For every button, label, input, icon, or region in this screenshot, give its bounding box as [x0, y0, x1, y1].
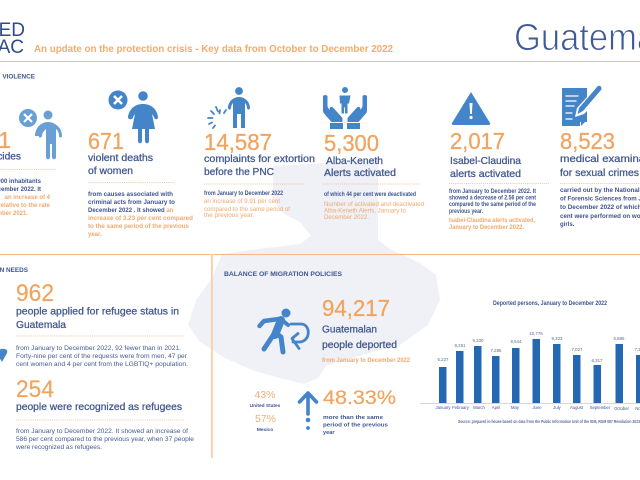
bar values: 9,323 — [552, 336, 563, 341]
description: recognized refugees — [15, 428, 195, 451]
month labels: July — [553, 405, 562, 410]
figure: 2,017: 2,017 — [450, 128, 505, 154]
figure: 671: 671 — [88, 128, 124, 154]
label: refugee applications: people applied for refugee status in — [16, 306, 179, 318]
description: homicides: an increase of 4 — [5, 195, 51, 201]
description: increase: period of the previous — [323, 422, 388, 428]
figure: 14,587: 14,587 — [204, 129, 272, 155]
panel: complaints for extortion: an increase of 9.91 per cent — [204, 199, 280, 205]
icon: partial figure at page edge — [0, 349, 7, 362]
description: refugee applications — [16, 345, 188, 368]
panel: complaints for extortion: the previous year. — [204, 213, 254, 219]
bar values: 6,317 — [592, 358, 603, 363]
panel: Isabel-Claudina alerts: Isabel-Claudina alerts activated, — [449, 218, 535, 224]
share: Mexico — [255, 413, 276, 433]
description: increase: more than the same — [323, 415, 383, 421]
month labels: January — [436, 405, 451, 410]
description: violent deaths: to the same period of the previous — [88, 224, 190, 230]
description: Isabel-Claudina: compared to the same period of the — [449, 202, 537, 208]
bar values: 9,544 — [510, 339, 522, 344]
chart title: Deported persons, January to December 2022 — [493, 301, 608, 307]
label: medical examinations — [560, 154, 640, 179]
share: United States: United States — [250, 403, 281, 409]
month labels — [436, 405, 640, 411]
panel: Alba-Keneth alerts: Alba-Keneth Alerts, January to — [324, 208, 407, 214]
month labels: September — [590, 405, 611, 410]
icon: document and pen — [562, 86, 602, 126]
description: violent deaths: from causes associated with — [88, 192, 173, 198]
description: violent deaths: December 2022 . It showed an — [88, 208, 174, 214]
figure: 8,523: 8,523 — [560, 128, 615, 154]
description: recognized refugees: from January to December 2022. It showed an increase of — [16, 428, 188, 435]
figure: 48.33%: 48.33% — [323, 387, 396, 409]
background map of Guatemala — [188, 160, 440, 384]
bar values: 9,251 — [454, 343, 466, 348]
heading: balance of migration policies: BALANCE OF MIGRATION POLICIES — [224, 271, 343, 278]
icon: warning triangle — [452, 92, 490, 125]
description: Alba-Keneth: of which 44 per cent were deactivated — [324, 192, 416, 198]
panel: Isabel-Claudina alerts: January to December 2022. — [449, 225, 524, 231]
description: refugee applications: from January to December 2022, 92 fewer than in 2021. — [16, 345, 181, 352]
panel: medical examinations — [560, 86, 640, 228]
bar values — [438, 331, 640, 363]
description: increase: year — [323, 430, 335, 436]
figure: 962: 962 — [16, 280, 54, 307]
bar values: 9,330 — [472, 338, 484, 343]
label: Isabel-Claudina: alerts activated — [450, 169, 521, 180]
month labels: October — [614, 406, 630, 411]
panel: complaints for extortion — [204, 87, 315, 219]
label: medical examinations: for sexual crimes — [560, 168, 639, 179]
share: Mexico: Mexico — [257, 427, 273, 433]
bar values: 7,286 — [490, 348, 502, 353]
label: Alba-Keneth: Alerts activated — [324, 168, 396, 179]
figure: 254: 254 — [16, 376, 54, 403]
description: Isabel-Claudina: showed a decrease of 2.56 per cent — [449, 196, 536, 202]
description: homicides — [0, 179, 51, 217]
subtitle: An update on the protection crisis - Key data from October to December 2022 — [34, 44, 393, 55]
month labels: May — [511, 405, 520, 410]
label: Isabel-Claudina: Isabel-Claudina — [450, 156, 521, 167]
icon: homicide victim — [19, 109, 62, 159]
period note: from January to December 2022 — [322, 358, 411, 364]
icon: up arrow — [300, 393, 316, 430]
panel: Alba-Keneth alerts: Number of activated and deactivated — [324, 202, 424, 208]
label: people deported: Guatemalan — [322, 324, 377, 336]
month labels: March — [473, 405, 485, 410]
label: refugee applications: Guatemala — [16, 320, 66, 331]
panel: homicides — [0, 109, 62, 217]
bar values: 6,227 — [438, 357, 449, 362]
label: complaints: complaints for extortion — [204, 154, 315, 165]
label: people deported: people deported — [322, 340, 397, 351]
label: Isabel-Claudina — [450, 156, 521, 180]
description: refugee applications: Forty-nine per cent of the requests were from men, 47 per — [16, 353, 187, 360]
description: recognized refugees: were recognized as refugees. — [15, 444, 102, 451]
logo — [0, 20, 25, 58]
month labels: August — [570, 405, 584, 410]
description: refugee applications: cent women and 4 per cent from the LGBTIQ+ population. — [16, 361, 188, 368]
section heading: violence: VIOLENCE — [2, 74, 36, 80]
month labels: June — [532, 405, 542, 410]
panel: complaints for extortion: compared to the same period of — [204, 207, 290, 213]
description: violent deaths: year. — [88, 232, 102, 238]
bar chart: deported persons — [420, 301, 640, 424]
bar values: 6,885 — [614, 336, 625, 341]
description: increase — [323, 415, 388, 436]
label: violent deaths of women: violent deaths — [88, 153, 153, 164]
label: complaints — [204, 154, 315, 178]
label: complaints: before the PNC — [204, 167, 274, 178]
share: Mexico: 57% — [255, 413, 276, 425]
icon: person and burst — [208, 87, 250, 128]
icon: woman with x — [108, 90, 158, 143]
month labels: February — [452, 405, 470, 410]
description: complaints: from January to December 2022 — [204, 191, 284, 197]
panel: balance of migration policies — [224, 271, 411, 436]
panel: Alba-Keneth alerts — [323, 87, 424, 221]
description: medical examinations: girls. — [560, 222, 575, 228]
description: medical examinations — [560, 188, 640, 228]
description: violent deaths: criminal acts from January to — [88, 200, 175, 206]
description: Isabel-Claudina: from January to December 2022. It — [449, 189, 536, 195]
panel: Alba-Keneth alerts: December 2022. — [324, 215, 369, 221]
description: Isabel-Claudina — [449, 189, 537, 215]
month labels: April — [492, 405, 500, 410]
figure: 94,217: 94,217 — [322, 295, 390, 321]
bar values: 10,775 — [529, 331, 543, 336]
label: Alba-Keneth: Alba-Keneth — [326, 156, 383, 167]
label: recognized refugees: people were recognized as refugees — [16, 402, 182, 413]
bar values: 7,027 — [572, 347, 583, 352]
panel: Isabel-Claudina alerts — [449, 92, 549, 231]
description: violent deaths: increase of 3.23 per cent compared — [88, 216, 193, 222]
bars — [439, 339, 640, 403]
label: Alba-Keneth — [324, 156, 396, 179]
icon: hands protecting a child — [323, 87, 367, 129]
description: Isabel-Claudina: previous year. — [449, 209, 483, 215]
label: refugee applications — [16, 306, 179, 331]
label: violent deaths of women — [88, 153, 153, 177]
description: violent deaths — [88, 192, 193, 238]
label: people deported — [322, 324, 397, 351]
share: United States — [250, 389, 281, 409]
icon: person returning — [260, 308, 308, 352]
label: violent deaths of women: of women — [88, 166, 133, 177]
share: United States: 43% — [254, 389, 276, 401]
figure: 5,300: 5,300 — [324, 130, 379, 156]
panel: protection needs — [0, 267, 195, 451]
description: recognized refugees: 586 per cent compared to the previous year, when 37 people — [16, 436, 195, 443]
panel: violent deaths of women — [88, 90, 193, 238]
